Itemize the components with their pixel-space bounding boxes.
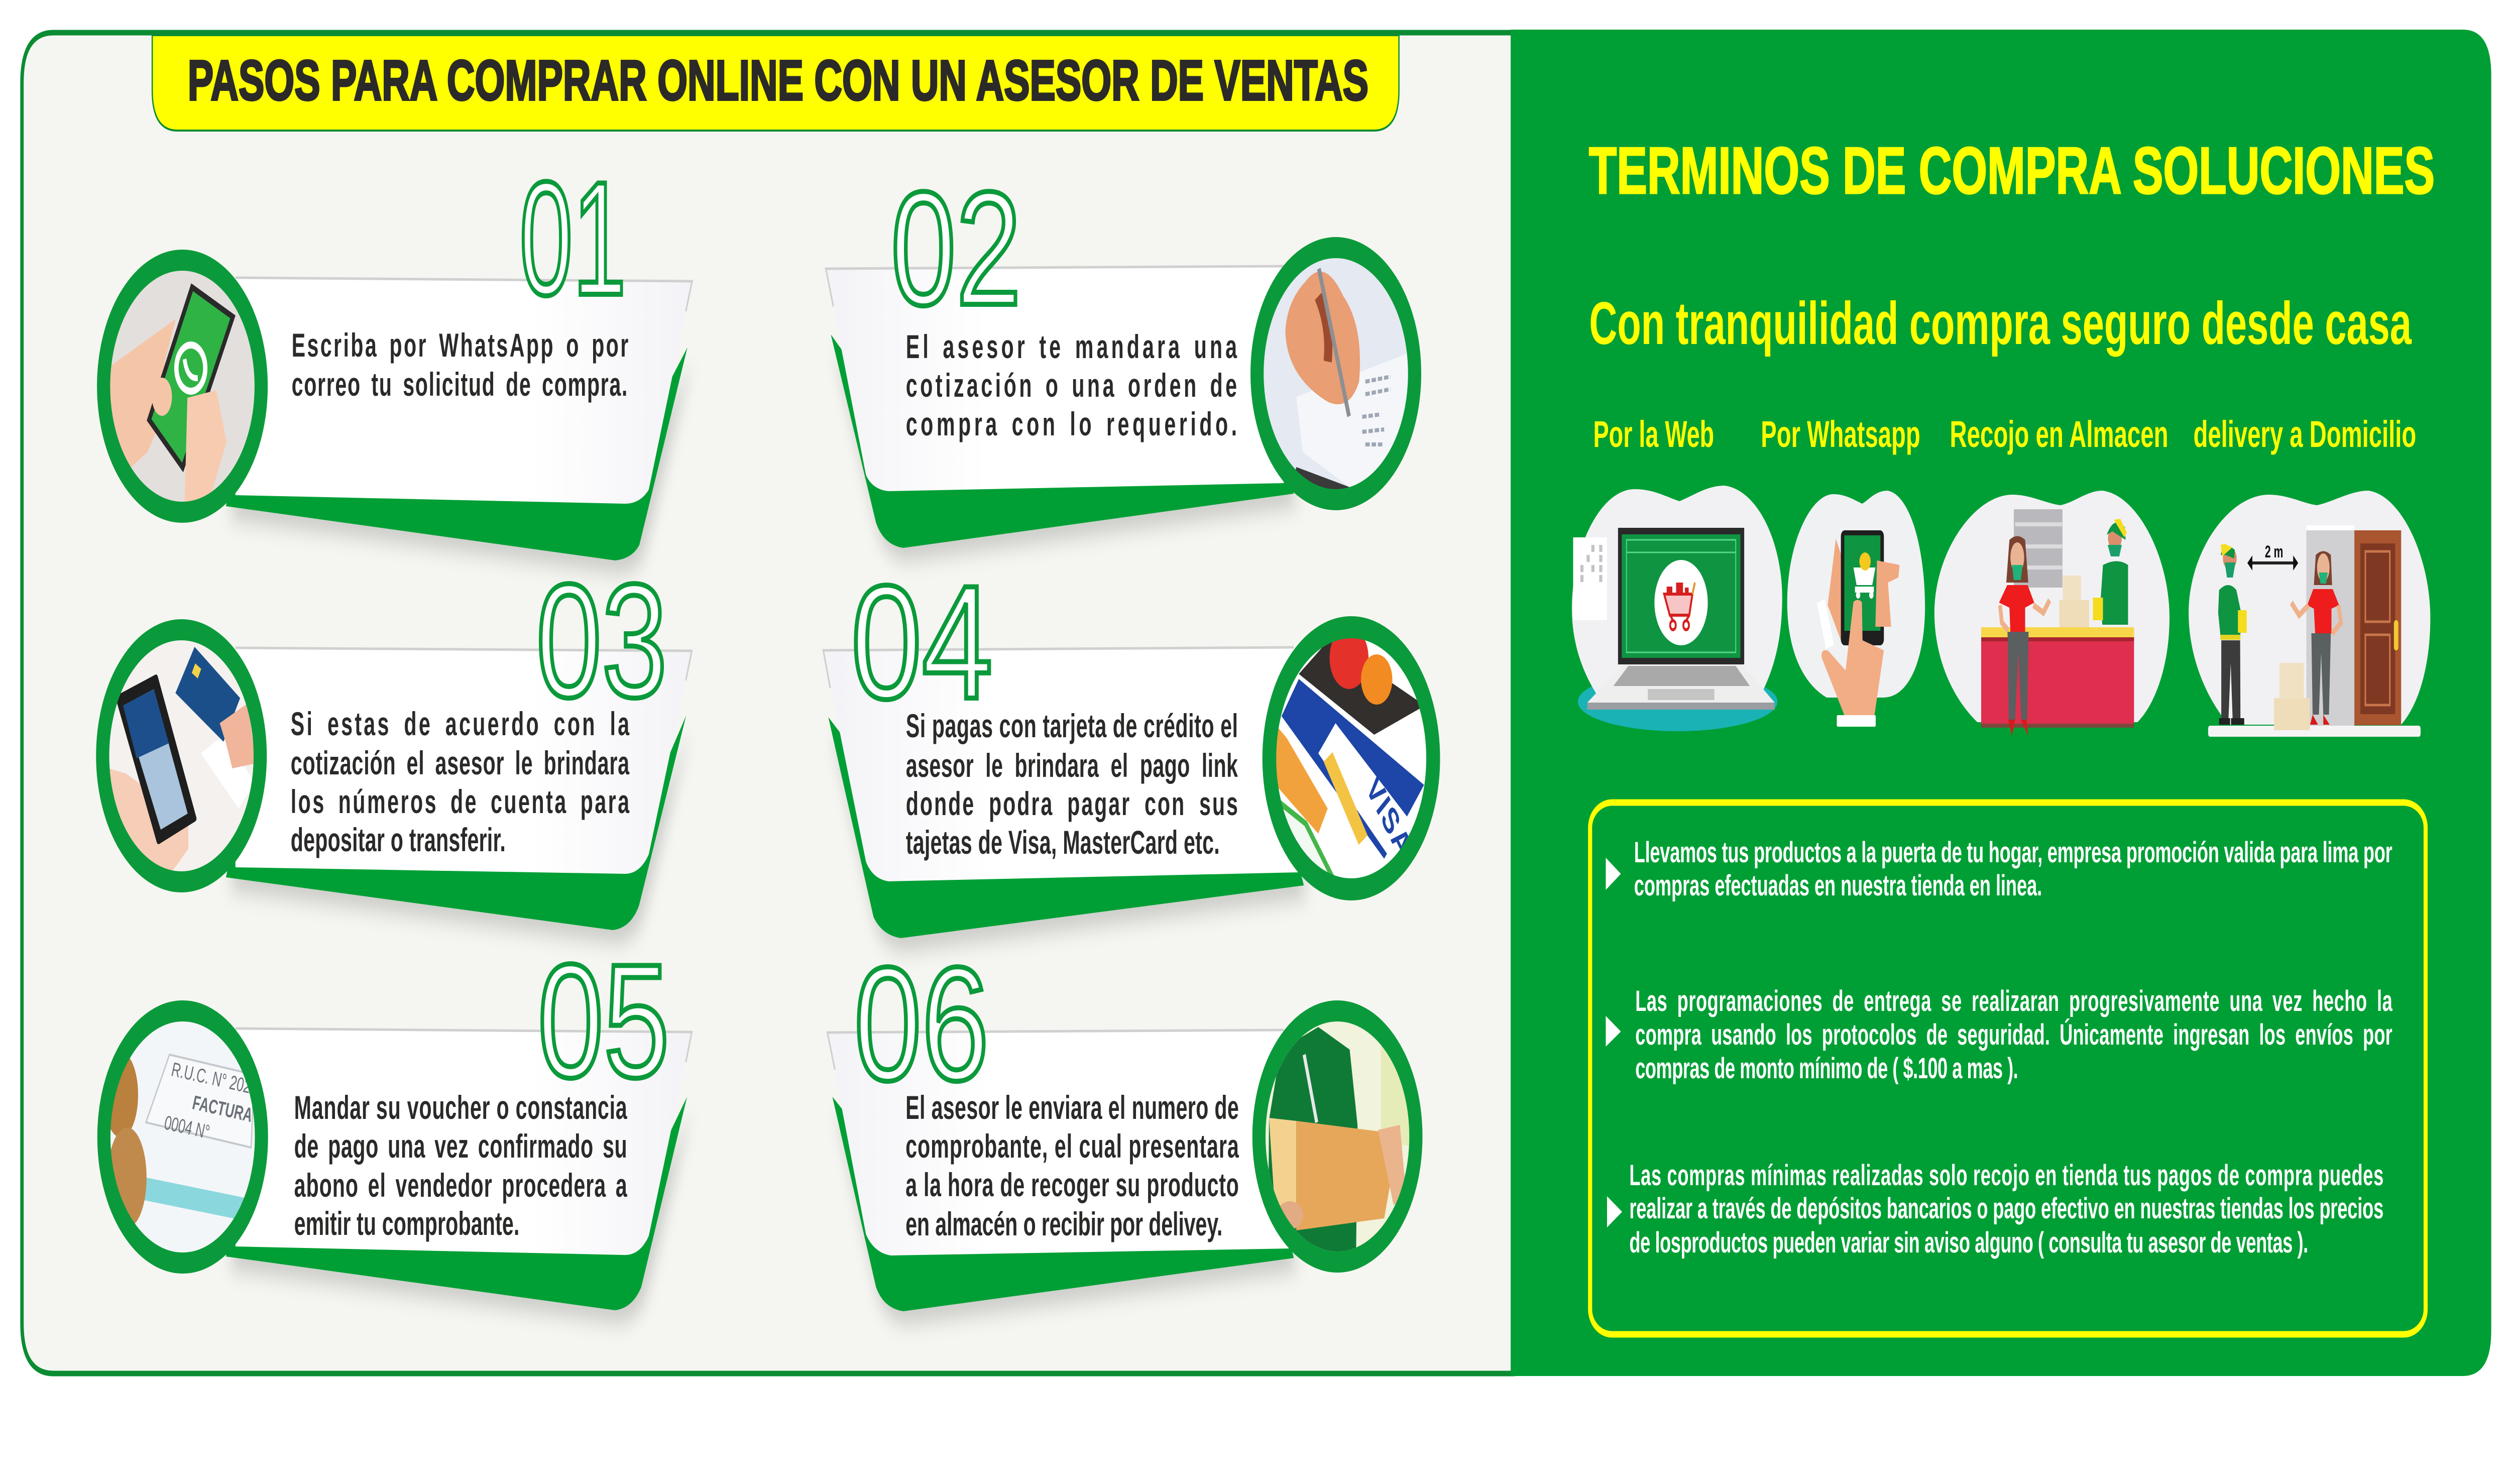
illustration: móvil con mano bbox=[1787, 491, 1925, 727]
step 06: comprobante, el cual presentara bbox=[905, 1127, 1239, 1165]
icon: foto manos con WhatsApp bbox=[103, 260, 261, 512]
icon: foto mano firmando bbox=[1257, 248, 1415, 500]
step 05: 05 bbox=[538, 931, 669, 1111]
step 02: El asesor te mandara una bbox=[906, 328, 1237, 365]
bullet: compras mínimas: realizar a través de depósitos bancarios o pago efectivo en nuestras tiendas los precios bbox=[1629, 1192, 2383, 1225]
title banner bbox=[152, 35, 1399, 131]
step 04 bbox=[823, 552, 1433, 938]
icon: flecha 2 m bbox=[2247, 542, 2298, 570]
step 06: a la hora de recoger su producto bbox=[905, 1166, 1239, 1203]
illustration: delivery a domicilio bbox=[2189, 491, 2430, 737]
step 03 bbox=[102, 550, 692, 930]
bullet: entrega a domicilio: compras efectuadas en nuestra tienda en linea. bbox=[1634, 869, 2042, 902]
label: por whatsapp: Por Whatsapp bbox=[1761, 414, 1920, 455]
heading: terminos: TERMINOS DE COMPRA SOLUCIONES bbox=[1589, 134, 2435, 208]
icon: foto factura: 0004 N° bbox=[163, 1112, 210, 1144]
step 03: los números de cuenta para bbox=[291, 783, 629, 820]
icon: foto tarjetas de crédito: VISA bbox=[1361, 768, 1416, 864]
illustration: laptop con carrito bbox=[1572, 486, 1782, 731]
bullet: compras mínimas bbox=[1607, 1159, 2383, 1259]
step 04: 04 bbox=[851, 552, 993, 732]
step 06: 06 bbox=[854, 934, 989, 1114]
icon: foto factura bbox=[103, 1011, 272, 1263]
bullet: entrega a domicilio: Llevamos tus productos a la puerta de tu hogar, empresa promoción valida para lima por bbox=[1634, 836, 2392, 869]
panel: condiciones bbox=[1590, 803, 2426, 1334]
label: por la web: Por la Web bbox=[1593, 414, 1714, 455]
step 04: asesor le brindara el pago link bbox=[906, 747, 1238, 784]
bullet: compras mínimas: Las compras mínimas realizadas solo recojo en tienda tus pagos de compra puedes bbox=[1629, 1159, 2383, 1192]
step 02 bbox=[826, 158, 1415, 548]
step 04: tajetas de Visa, MasterCard etc. bbox=[906, 824, 1220, 861]
panel: pasos para comprar bbox=[22, 33, 1513, 1374]
step 02: compra con lo requerido. bbox=[906, 405, 1237, 442]
bullet: programaciones: compras de monto mínimo de ( $.100 a mas ). bbox=[1635, 1052, 2018, 1085]
step 01 bbox=[103, 148, 692, 560]
illustration: recojo en almacén bbox=[1934, 491, 2170, 736]
title banner: PASOS PARA COMPRAR ONLINE CON UN ASESOR DE VENTAS bbox=[188, 49, 1368, 112]
step 06: El asesor le enviara el numero de bbox=[905, 1089, 1239, 1126]
icon: flecha 2 m: 2 m bbox=[2265, 542, 2283, 561]
icon: foto móvil y tarjeta bbox=[102, 630, 260, 884]
figure: trabajador bbox=[2093, 519, 2128, 625]
bullet: entrega a domicilio bbox=[1606, 836, 2392, 902]
bullet: programaciones: Las programaciones de entrega se realizaran progresivamente una vez hecho la bbox=[1635, 985, 2393, 1017]
label: delivery a domicilio: delivery a Domicilio bbox=[2194, 414, 2416, 455]
icon: foto factura: R.U.C. N° 202695 bbox=[171, 1059, 272, 1103]
step 04: donde podra pagar con sus bbox=[906, 785, 1238, 822]
step 05: de pago una vez confirmado su bbox=[294, 1127, 627, 1165]
step 03: Si estas de acuerdo con la bbox=[291, 705, 629, 742]
panel: terminos de compra bbox=[1511, 30, 2491, 1376]
step 05: abono el vendedor procedera a bbox=[294, 1167, 627, 1204]
step 06: en almacén o recibir por delivey. bbox=[905, 1205, 1222, 1242]
figure: clienta bbox=[1999, 536, 2049, 736]
step 03: depositar o transferir. bbox=[291, 821, 506, 858]
step 05 bbox=[103, 931, 692, 1310]
bullet: programaciones: compra usando los protocolos de seguridad. Únicamente ingresan los envíos por bbox=[1635, 1018, 2392, 1051]
label: recojo en almacen: Recojo en Almacen bbox=[1950, 414, 2168, 455]
bullet: compras mínimas: de losproductos pueden variar sin aviso alguno ( consulta tu asesor de ventas ). bbox=[1629, 1226, 2308, 1259]
step 05: Mandar su voucher o constancia bbox=[294, 1089, 627, 1126]
step 03: 03 bbox=[536, 550, 667, 731]
step 05: emitir tu comprobante. bbox=[294, 1205, 519, 1242]
icon: foto tarjetas de crédito bbox=[1270, 627, 1433, 889]
figure: clienta en puerta bbox=[2291, 551, 2341, 725]
icon: foto entrega de caja bbox=[1259, 1011, 1416, 1266]
step 03: cotización el asesor le brindara bbox=[291, 744, 629, 781]
bullet: programaciones bbox=[1606, 985, 2393, 1085]
step 02: cotización o una orden de bbox=[906, 367, 1237, 404]
step 01: Escriba por WhatsApp o por bbox=[292, 326, 628, 364]
heading: tranquilidad: Con tranquilidad compra seguro desde casa bbox=[1589, 290, 2412, 357]
step 04: Si pagas con tarjeta de crédito el bbox=[906, 707, 1238, 744]
figure: repartidor bbox=[2218, 544, 2247, 725]
step 02: 02 bbox=[891, 158, 1021, 338]
icon: foto factura: FACTURA bbox=[192, 1092, 253, 1127]
step 01: correo tu solicitud de compra. bbox=[292, 366, 627, 403]
step 01: 01 bbox=[519, 148, 626, 328]
step 06 bbox=[828, 934, 1416, 1311]
